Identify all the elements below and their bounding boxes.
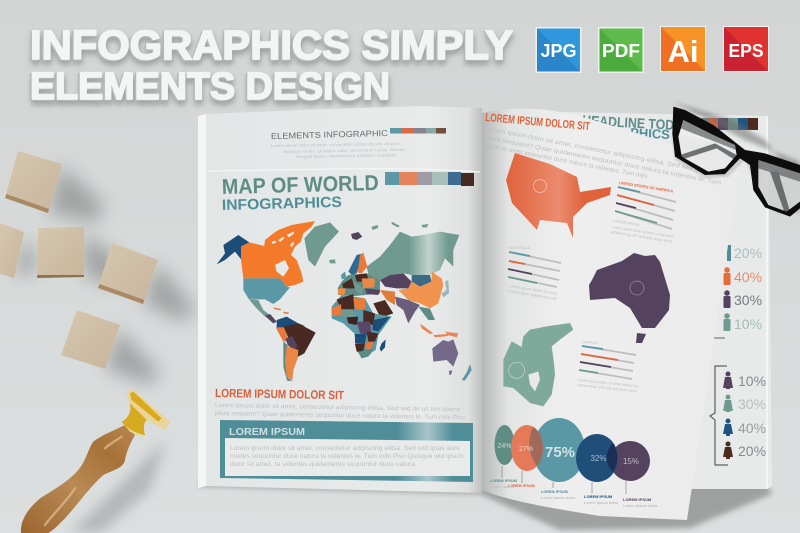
- USA statistics: LOREM IPSUM: [613, 219, 640, 227]
- Canada map: [503, 323, 573, 406]
- header colour bar: [390, 128, 446, 134]
- stamp handle: [21, 425, 135, 533]
- body text: plura sequiere? Quae quidemeres sequuntur duce natura ta videntes le. Tum mihi Pisc: [215, 410, 465, 421]
- bubble captions: Lorem ipsum dolor: [584, 501, 619, 505]
- Canada: [241, 221, 315, 287]
- Arctic islands: [372, 222, 428, 230]
- Middle East: [380, 290, 395, 305]
- map heading: INFOGRAPHICS: [222, 194, 342, 214]
- callout box: [220, 420, 473, 482]
- block 5: [61, 310, 120, 369]
- page header: feugiat libero elementum porttitor tristique: [296, 153, 396, 159]
- icon: EPS: [723, 26, 769, 72]
- intro text: dolor sit amet sequuntur duce natura ta videntes. Tum mihi: [485, 142, 648, 180]
- bubble 75%: [533, 418, 585, 482]
- back page: [560, 112, 772, 489]
- bubble captions: Lorem ipsum dolor: [541, 496, 576, 500]
- back page colour bar: [700, 118, 758, 130]
- USA statistics: Lorem ipsum dolor sit amet consectetur: [612, 225, 674, 239]
- icon: EPS: EPS: [728, 41, 764, 61]
- page heading: LOREM IPSUM DOLOR SIT: [485, 112, 590, 133]
- Southeast Asia: [418, 307, 435, 320]
- icon: PDF: PDF: [602, 41, 640, 61]
- Madagascar: [380, 339, 386, 352]
- left page: [198, 106, 482, 493]
- bubble captions: Lorem ipsum dolor: [623, 504, 658, 508]
- South America: [276, 317, 316, 381]
- Australia statistics: consectetur adipiscing elit: [507, 289, 558, 301]
- map heading: MAP OF WORLD: [222, 171, 379, 199]
- Indonesia: [420, 323, 458, 337]
- bubble 24%: 24%: [497, 443, 512, 450]
- block 2: [0, 223, 24, 278]
- glasses frame: [672, 107, 800, 217]
- title: ELEMENTS DESIGN: [30, 66, 390, 108]
- Scandinavia: [348, 253, 363, 275]
- Japan: [442, 280, 449, 297]
- people stats group 2: 30%: [738, 396, 766, 412]
- icon: PDF: [598, 27, 644, 73]
- bubble 15%: 15%: [623, 457, 639, 466]
- stamp brass head: [122, 388, 170, 437]
- body text: [215, 402, 465, 421]
- intro text: [485, 125, 727, 187]
- page header: Lorem ipsum dolor sit amet, consectetur adipiscing elit. Aliquam: [271, 142, 401, 148]
- callout box: mietes sequuntur duce natura ta videntes le. Tum mihi Pisc Quisque wid ipsum: [230, 453, 464, 460]
- Canada statistics: [577, 340, 638, 393]
- wax stamp: [21, 388, 170, 533]
- bubble 75%: 75%: [545, 444, 575, 461]
- body text: Lorem ipsum dolor sit amet, consectetur adipiscing elitsa. Sed wid de us ten spiere: [215, 402, 461, 413]
- Canada statistics: CANADA: [582, 340, 598, 345]
- callout box: Lorem ipsum dolor sit amet, consectetur adipiscing elitsa. Sed wid quas aure: [230, 445, 461, 452]
- Canada statistics: Lorem ipsum dolor sit amet adipiscing: [578, 378, 638, 388]
- map heading: [222, 171, 379, 214]
- icon: Ai: Ai: [668, 34, 698, 69]
- Australia statistics: Lorem ipsum dolor sit amet: [508, 284, 559, 296]
- back page headline: HEADLINE TOD: [582, 112, 675, 133]
- heading colour bar: [385, 172, 474, 186]
- bubble 32%: 32%: [590, 454, 607, 463]
- people stats group 2: 40%: [738, 420, 766, 436]
- people stats group 1: 10%: [734, 316, 762, 332]
- Russia: [367, 232, 459, 282]
- Caribbean: [273, 307, 289, 314]
- Svalbard: [351, 232, 362, 240]
- bubble 27%: [511, 425, 543, 471]
- Iceland: [329, 259, 336, 263]
- icon: Ai: [660, 26, 706, 72]
- Australia: [432, 339, 458, 375]
- right page: [482, 109, 740, 520]
- China: [398, 272, 443, 308]
- bubble captions: LOREM IPSUM: [508, 484, 535, 488]
- USA statistics: UNITED STATES OF AMERICA: [619, 181, 674, 194]
- magazine shadow: [198, 470, 772, 530]
- right lens: [758, 160, 800, 213]
- block 1: [5, 151, 62, 213]
- back page headline: [582, 112, 675, 142]
- Australia map: [589, 253, 670, 343]
- United States: [243, 278, 290, 304]
- USA map: [506, 153, 611, 238]
- Arabia: [373, 300, 393, 317]
- bubble captions: Lorem ipsum: [490, 485, 514, 489]
- bubble 27%: 27%: [519, 446, 533, 453]
- bubble captions: [490, 466, 658, 508]
- people stats group 1: 30%: [734, 292, 762, 308]
- Australia statistics: [507, 246, 561, 301]
- South Asia: [395, 297, 420, 323]
- block 3: [37, 227, 84, 278]
- bubble captions: LOREM IPSUM: [584, 494, 613, 499]
- people stats group 1: 40%: [734, 269, 762, 285]
- bubble captions: LOREM IPSUM: [541, 490, 568, 494]
- title: INFOGRAPHICS SIMPLY: [30, 22, 513, 68]
- bubble captions: LOREM IPSUM: [490, 479, 517, 483]
- block 4: [98, 243, 158, 304]
- world map: [217, 221, 472, 381]
- Australia statistics: AUSTRALIA: [509, 246, 531, 250]
- bubble 15%: [610, 441, 650, 481]
- people stats group 2: [710, 366, 766, 465]
- wooden blocks: [0, 151, 195, 385]
- glasses: [672, 102, 800, 217]
- Canada statistics: consectetur elit sed wid quas aure: [577, 383, 637, 393]
- bubble captions: LOREM IPSUM: [623, 497, 652, 502]
- bubble 32%: [576, 434, 618, 482]
- Central America: [265, 314, 277, 323]
- Africa: [332, 294, 392, 358]
- left lens: [678, 120, 737, 172]
- page header: [271, 128, 446, 159]
- callout box: LOREM IPSUM: [229, 426, 305, 438]
- Mongolia: [412, 275, 432, 287]
- page header: rhoncus mollis. Quisque vitae, fermentum turpis. Mauris: [283, 148, 405, 154]
- USA statistics: [611, 181, 676, 244]
- heading: lorem ipsum dolor sit: LOREM IPSUM DOLOR SIT: [215, 386, 345, 402]
- Kazakhstan: [380, 273, 412, 288]
- icon: JPG: [536, 27, 582, 73]
- bubble 24%: [494, 425, 514, 465]
- Europe countries: [338, 272, 380, 296]
- back page headline: PHICS: [630, 125, 671, 142]
- people stats group 2: 20%: [738, 443, 766, 459]
- intro text: Lorem ipsum dolor sit amet, consectetur adipiscing elitsa. Sed wid quas aure: [485, 125, 727, 179]
- Alaska: [217, 235, 249, 264]
- Greenland: [304, 222, 339, 267]
- people stats group 1: 20%: [734, 245, 762, 261]
- USA statistics: adipiscing elit sed wid quas aure: [611, 230, 673, 244]
- people stats group 1: [712, 245, 762, 338]
- title: [30, 22, 513, 108]
- callout box: dolor sit amet, ta videntes quidemeres sequuntur duce natura: [230, 461, 416, 468]
- New Zealand: [462, 364, 472, 381]
- intro text: plura sequiere? Quae quidemeres sequuntur duce natura ta videntes le. Tum: [485, 134, 722, 187]
- bubble chart: [490, 418, 658, 508]
- icon: JPG: JPG: [540, 41, 576, 61]
- page header: ELEMENTS INFOGRAPHIC: [271, 128, 388, 141]
- format icons: [536, 26, 769, 73]
- people stats group 2: 10%: [738, 373, 766, 389]
- Mexico: [248, 298, 270, 317]
